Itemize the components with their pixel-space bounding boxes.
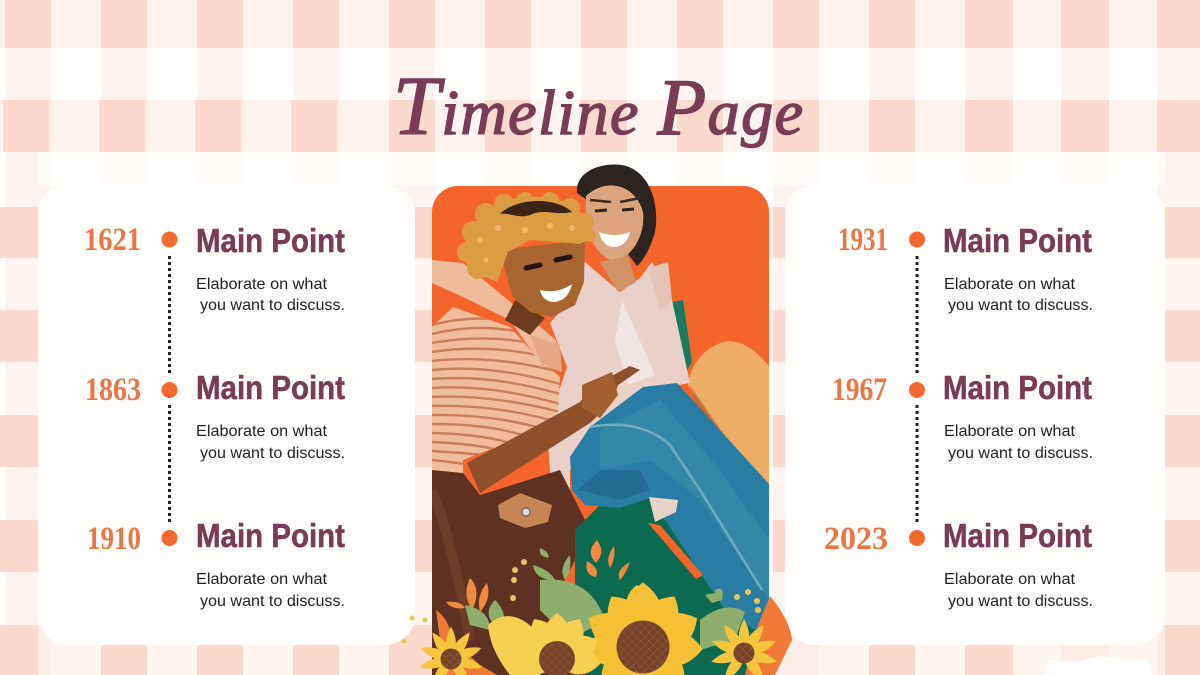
man's head (457, 192, 596, 335)
panel background (785, 185, 1165, 645)
timeline item: 1910: Elaborate on what (196, 571, 328, 588)
curly hair (457, 192, 596, 282)
timeline item: 2023: 2023 (824, 521, 888, 557)
striped shirt (432, 307, 560, 473)
buds (402, 559, 761, 644)
flower centres (440, 620, 754, 675)
orange leaves (436, 596, 792, 675)
timeline item: 1967: 1967 (832, 372, 887, 408)
timeline item: 1621: 1621 (84, 222, 141, 258)
connector: dotted line 1 (168, 256, 171, 373)
timeline item: 1863: Elaborate on what (196, 423, 328, 440)
timeline item: 1931: 1931 (838, 222, 888, 258)
timeline item: 1621 (84, 222, 345, 314)
title: Timeline Page (393, 60, 803, 153)
photo: two friends on orange background (402, 164, 792, 675)
panel: right timeline (785, 185, 1165, 645)
large sunflower (580, 582, 706, 675)
timeline item: 1931 (838, 222, 1093, 314)
timeline item: 1910 (87, 517, 345, 610)
timeline item: 1863: 1863 (85, 372, 141, 408)
timeline item: 2023: Main Point (943, 517, 1092, 554)
green cushion (575, 498, 755, 675)
timeline item: 2023: Elaborate on what (944, 571, 1076, 588)
small sunflower left (419, 627, 483, 675)
panel: left timeline (38, 185, 415, 645)
bag strap (672, 300, 692, 372)
man's arm around shoulder (432, 260, 562, 372)
jeans (570, 383, 769, 640)
woman's shirt (548, 262, 690, 490)
timeline item: 1863 (85, 369, 345, 462)
trousers (432, 470, 600, 675)
timeline item: 1910: 1910 (87, 521, 141, 557)
white cloth (649, 497, 678, 522)
timeline item: 1621: you want to discuss. (200, 297, 345, 314)
timeline item: 1931: you want to discuss. (948, 297, 1093, 314)
connector: dotted line 2 (916, 405, 918, 522)
man's forearm (467, 366, 640, 493)
small sunflower right (710, 619, 778, 675)
medium sunflower (488, 612, 603, 675)
timeline item: 2023: you want to discuss. (948, 593, 1093, 610)
connector: dotted line 2 (168, 405, 171, 522)
timeline item: 1967: Elaborate on what (944, 423, 1076, 440)
connector: dotted line 1 (916, 256, 918, 373)
timeline item: 1967 (832, 369, 1093, 462)
flower bouquet (402, 540, 792, 675)
timeline item: 1863: Main Point (196, 369, 345, 406)
timeline item: 1863: you want to discuss. (200, 445, 345, 462)
orange sliver (648, 523, 703, 579)
timeline item: 1621: Main Point (196, 222, 345, 259)
pillow (688, 341, 769, 484)
timeline item: 1931: Main Point (943, 222, 1092, 259)
timeline item: 1931: Elaborate on what (944, 276, 1076, 293)
timeline item: 1967: you want to discuss. (948, 445, 1093, 462)
panel background (38, 185, 415, 645)
timeline item: 1621: Elaborate on what (196, 276, 328, 293)
timeline item: 1967: Main Point (943, 369, 1092, 406)
timeline item: 1910: Main Point (196, 517, 345, 554)
green leaves (465, 548, 745, 650)
woman's head (577, 164, 656, 292)
timeline item: 2023 (824, 517, 1093, 610)
hand with ring (498, 493, 552, 528)
timeline item: 1910: you want to discuss. (200, 593, 345, 610)
